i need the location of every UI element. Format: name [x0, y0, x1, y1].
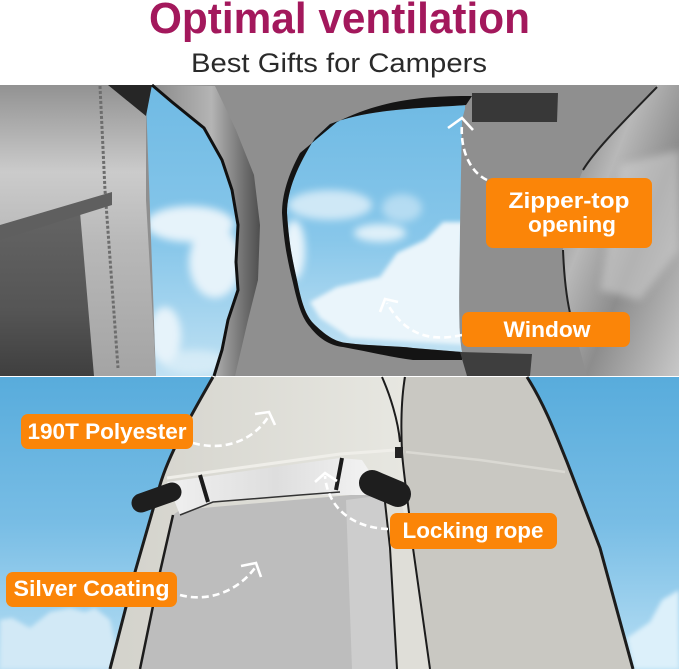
rope right end — [372, 483, 398, 494]
clouds right — [627, 590, 679, 669]
label: silver coating — [6, 572, 177, 607]
tent front left panel — [110, 377, 432, 669]
arrow: 190T polyester — [193, 412, 275, 446]
black corner and zipper slider — [108, 85, 152, 116]
square clip — [395, 447, 403, 458]
label: zipper-top opening: Zipper-top — [508, 188, 630, 213]
label: 190T polyester: 190T Polyester — [28, 419, 187, 444]
roll straps — [200, 458, 342, 502]
label: silver coating: Silver Coating — [14, 576, 170, 601]
left fabric wall — [0, 85, 156, 376]
label: locking rope — [390, 513, 557, 549]
label: zipper-top opening — [486, 178, 652, 248]
stitched seam — [100, 86, 118, 368]
right fabric fold — [563, 85, 679, 376]
pocket dark panel — [0, 212, 94, 376]
light edge strip — [385, 495, 430, 669]
pocket band — [0, 192, 112, 240]
fold on inner panel — [346, 495, 397, 669]
roll bottom edge — [180, 492, 340, 515]
silver coated inner panel — [140, 492, 397, 669]
arrow: locking rope — [315, 473, 388, 529]
panel: tent exterior — [0, 377, 679, 669]
right fold dark edge — [563, 87, 657, 313]
interior fabric background — [0, 85, 679, 376]
arrow: silver coating — [180, 563, 261, 597]
pocket — [0, 192, 112, 376]
clouds left — [0, 608, 120, 669]
label: 190T polyester — [21, 414, 193, 449]
zipper flap beside left window — [152, 85, 260, 376]
middle window zipper edge — [282, 96, 472, 360]
roll top seam — [167, 450, 395, 478]
sky background — [0, 377, 679, 669]
bottom zipper tab — [460, 352, 532, 376]
label: window: Window — [504, 317, 591, 342]
left flap black edge — [152, 85, 238, 376]
subtitle: Best Gifts for Campers — [191, 48, 487, 78]
label: window — [462, 312, 630, 347]
top zipper tab — [472, 93, 558, 122]
middle window sky — [280, 100, 470, 355]
tent outlines — [110, 377, 633, 669]
silver rolled window — [167, 458, 385, 515]
left window sky — [146, 86, 236, 376]
arrow: window — [380, 299, 462, 337]
panel: tent interior with windows — [0, 85, 679, 376]
right fold highlights — [600, 150, 679, 300]
arrow: zipper-top opening — [448, 118, 487, 180]
tent right panel — [402, 377, 633, 669]
label: zipper-top opening: opening — [528, 212, 616, 237]
large cumulus cloud — [310, 222, 470, 345]
label: locking rope: Locking rope — [402, 518, 544, 543]
rope left end — [141, 492, 172, 503]
tent panel crease — [406, 452, 565, 472]
